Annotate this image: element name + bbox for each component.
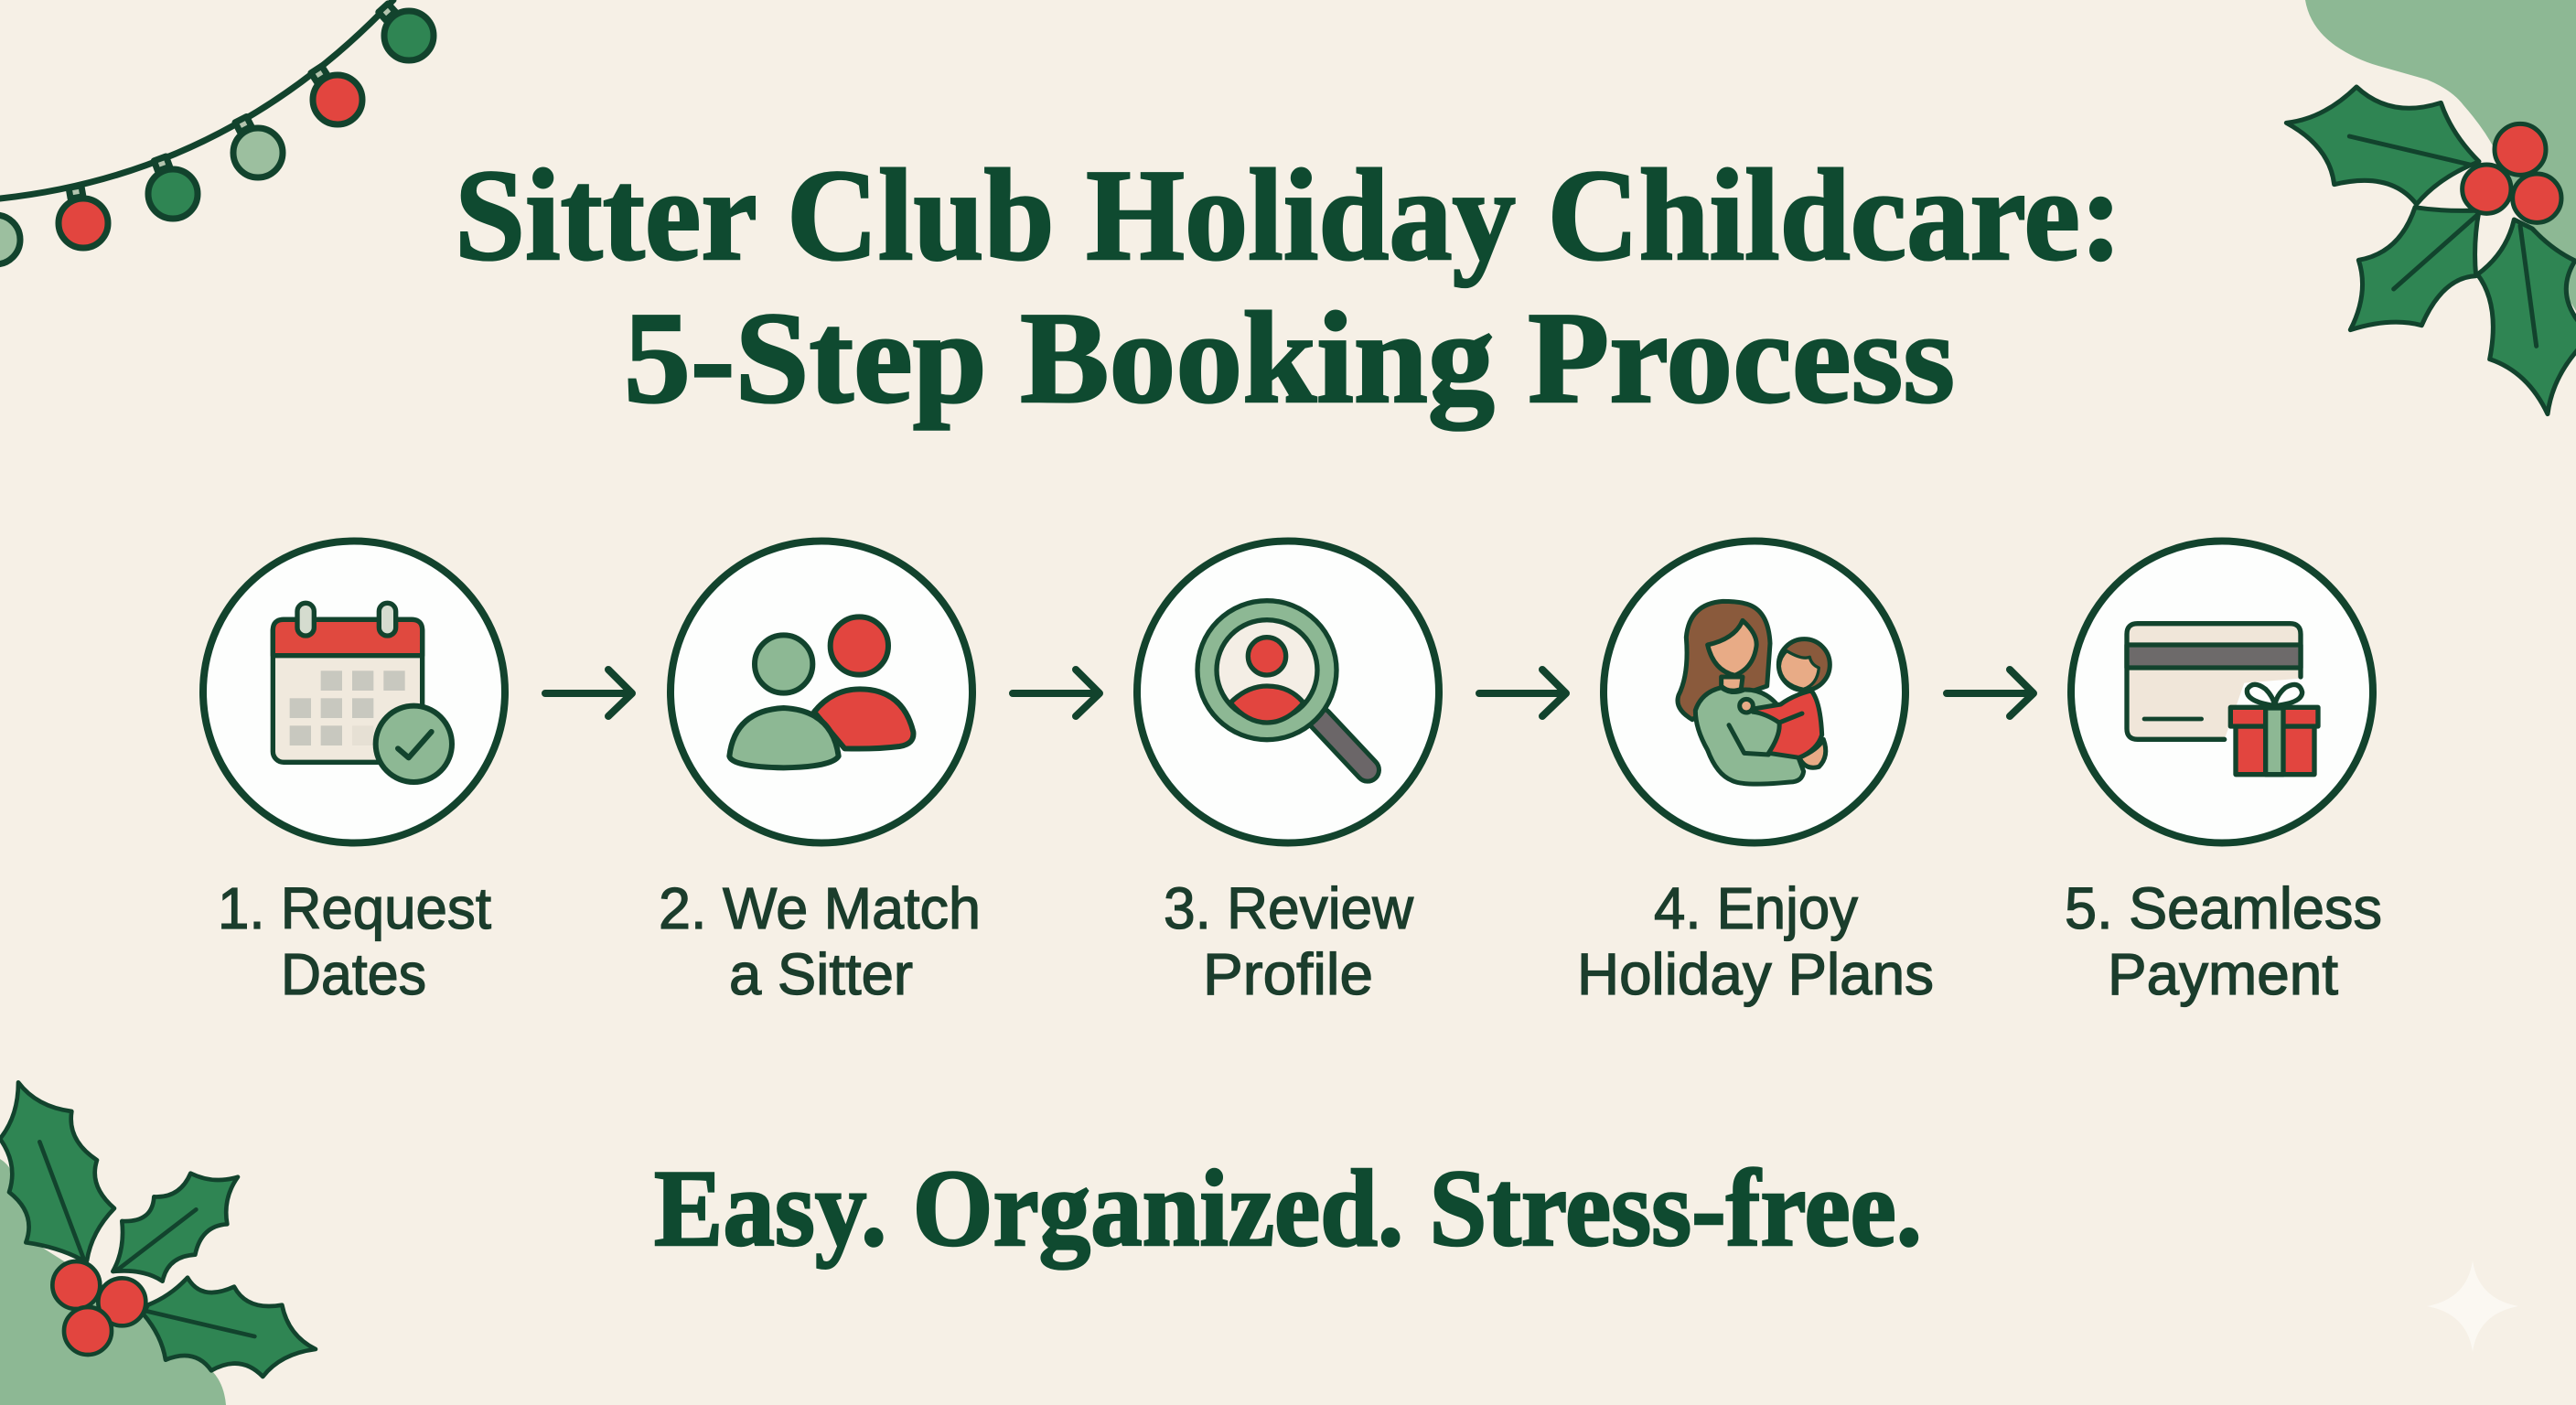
step 4 label: Holiday Plans xyxy=(1577,941,1934,1007)
title: 5-Step Booking Process xyxy=(624,285,1955,431)
step 4: enjoy holiday plans xyxy=(1577,542,1934,1007)
step 4 circle xyxy=(1604,542,1905,843)
title xyxy=(455,143,2122,431)
step 1 label xyxy=(218,875,491,1007)
garland: string of holiday lights xyxy=(0,0,434,264)
icon: two people xyxy=(729,617,913,767)
holly: top right xyxy=(2286,87,2576,414)
step 1 label: 1. Request xyxy=(218,875,491,941)
icon: calendar with check xyxy=(273,603,452,782)
icon: sitter holding child xyxy=(1678,601,1830,784)
corner decoration: top right blob xyxy=(2305,0,2576,311)
step 2 label: 2. We Match xyxy=(659,875,981,941)
step 4 label: 4. Enjoy xyxy=(1654,875,1858,941)
step 3 label: Profile xyxy=(1203,941,1373,1007)
step 2 circle xyxy=(671,542,972,843)
step 5 label: 5. Seamless xyxy=(2065,875,2382,941)
step 5: seamless payment xyxy=(2065,542,2382,1007)
arrow 4 to 5 xyxy=(1947,670,2034,716)
icon: sparkle watermark xyxy=(2427,1260,2518,1352)
step 2: we match a sitter xyxy=(659,542,981,1007)
step 3 circle xyxy=(1137,542,1439,843)
arrow 2 to 3 xyxy=(1013,670,1100,716)
step 3: review profile xyxy=(1137,542,1439,1007)
step 3 label: 3. Review xyxy=(1164,875,1414,941)
icon: credit card with gift xyxy=(2127,624,2318,775)
step 2 label xyxy=(659,875,981,1007)
title: Sitter Club Holiday Childcare: xyxy=(455,143,2122,287)
step 1 label: Dates xyxy=(281,941,426,1007)
holly: bottom left xyxy=(0,1082,316,1377)
step 1: request dates xyxy=(203,542,505,1007)
icon: magnifying glass over profile xyxy=(1197,601,1368,770)
step 1 circle xyxy=(203,542,505,843)
step 5 circle xyxy=(2071,542,2373,843)
step 4 label xyxy=(1577,875,1934,1007)
arrow 3 to 4 xyxy=(1479,670,1566,716)
step 3 label xyxy=(1164,875,1414,1007)
arrow 1 to 2 xyxy=(545,670,632,716)
step 2 label: a Sitter xyxy=(729,941,913,1007)
step 5 label: Payment xyxy=(2108,941,2338,1007)
corner decoration: bottom left blob xyxy=(0,1159,226,1405)
step 5 label xyxy=(2065,875,2382,1007)
tagline: Easy. Organized. Stress-free. xyxy=(654,1147,1922,1270)
